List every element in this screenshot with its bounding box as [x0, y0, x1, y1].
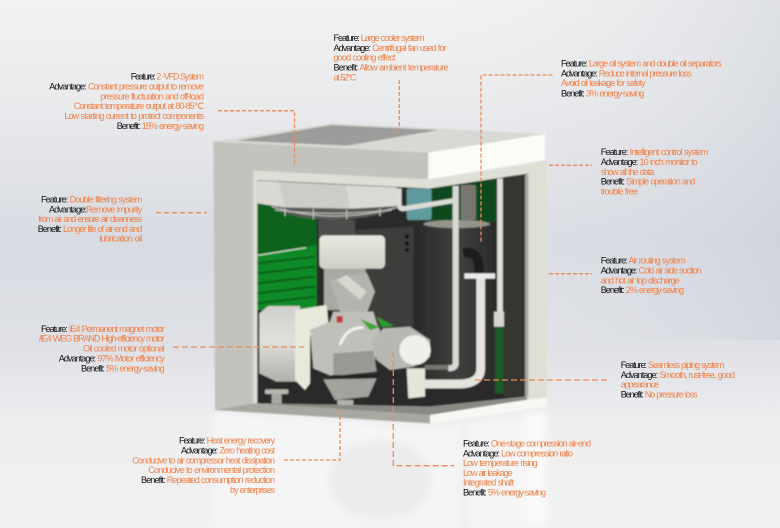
valve: [461, 185, 476, 220]
big discharge pipe: [424, 273, 495, 384]
callout text: Low starting current to protect components: [64, 111, 204, 121]
callout text: Constant temperature output at 80-85℃: [74, 101, 204, 111]
callout: IE4 permanent magnet motor: [39, 324, 304, 373]
callout text: Benefit: 3% energy-saving: [561, 88, 644, 98]
callout text: Advantage: Reduce internal pressure loss: [561, 68, 692, 78]
callout text: Feature: Heat energy recovery: [179, 435, 275, 445]
hopper and foot: [265, 378, 377, 410]
callout text: Avoid oil leakage for safety: [561, 78, 646, 88]
side dark panel: [504, 175, 525, 397]
callout text: by enterprises: [230, 485, 275, 495]
callout: large oil system: [481, 58, 722, 243]
leader line: [173, 346, 304, 348]
callout text: from air and ensure air cleanness: [38, 214, 143, 224]
callout text: Benefit: Longer life of air-end and: [38, 224, 142, 234]
callout text: Advantage: Centrifugal fan used for: [334, 43, 446, 53]
callout text: Integrated shaft: [463, 478, 514, 488]
callout text: Feature: IE4 Permanent magnet motor: [41, 324, 165, 334]
callout text: Advantage: Smooth, rust-free, good: [621, 370, 735, 380]
cabinet shell: [213, 123, 547, 423]
callout text: appearance: [621, 380, 659, 390]
roof: [213, 123, 545, 153]
callout text: show all the data: [601, 167, 655, 177]
callout text: Benefit: Allow ambient temperature: [334, 63, 448, 73]
callout text: [39, 324, 165, 373]
callout text: Conducive to environmental protection: [148, 465, 275, 475]
callout text: at 52°C: [334, 72, 357, 82]
leader line: [218, 111, 294, 165]
callout text: Benefit: Repeated consumption reduction: [141, 475, 275, 485]
callout: double filtering system: [38, 194, 207, 244]
callout text: Advantage: Constant pressure output to remove: [49, 82, 204, 92]
callout: seamless piping system: [475, 360, 735, 399]
roof grille: [237, 125, 438, 146]
callout text: /IE4 WEG BRAND High-efficiency motor: [39, 334, 165, 344]
callout text: Advantage: 97% Motor efficiency: [59, 353, 165, 363]
leader line: [549, 164, 592, 166]
callout text: [561, 58, 722, 98]
fan guard: [272, 206, 397, 220]
teal filter: [407, 188, 432, 220]
oil tank: [418, 220, 495, 380]
callout: heat energy recovery: [132, 410, 340, 495]
callout text: Feature: 2 -VFD System: [131, 72, 204, 82]
callout text: Advantage: 10 inch monitor to: [601, 157, 698, 167]
right green panels: [432, 179, 497, 222]
dark back panel: [353, 227, 413, 327]
callout text: Feature: Large oil system and double oil separators: [561, 58, 722, 68]
callout text: [132, 435, 275, 495]
callout text: [38, 194, 143, 244]
callout text: Advantage: Low compression ratio: [463, 448, 573, 458]
leader line: [284, 410, 340, 460]
callout text: Benefit: No pressure loss: [621, 389, 698, 399]
callout: one-stage compression air-end: [393, 352, 591, 498]
callout: 2-VFD system: [49, 72, 294, 165]
callout text: Feature: Double filtering system: [41, 194, 142, 204]
callout text: Benefit: 5% energy-saving: [81, 363, 165, 373]
callout text: [621, 360, 735, 399]
white roof face: [428, 134, 545, 179]
callout text: Benefit: 5% energy-saving: [463, 488, 546, 498]
callout text: Low temperature rising: [463, 458, 538, 468]
callout text: good cooling effect: [334, 53, 396, 63]
callout text: and hot air top discharge: [601, 275, 680, 285]
callout text: trouble free: [601, 187, 638, 197]
leader line: [481, 75, 552, 243]
callout text: Feature: Seamless piping system: [621, 360, 724, 370]
cabinet interior: [257, 174, 525, 407]
callout: air routing system: [549, 256, 702, 295]
white base face: [430, 397, 547, 423]
callout text: Feature: Air routing system: [601, 256, 686, 266]
callout text: Benefit: Simple operation and: [601, 177, 695, 187]
front frame: [213, 142, 430, 423]
callout text: Benefit: 15% energy-saving: [117, 121, 204, 131]
base lip: [215, 403, 430, 423]
under roof strip: [253, 165, 528, 403]
callout text: [334, 33, 448, 82]
leader line: [156, 212, 207, 214]
leader line: [393, 352, 454, 466]
piping: top and vertical: [399, 178, 504, 368]
callout text: Advantage: Cold air side suction: [601, 266, 702, 276]
callout text: Oil cooled motor optional: [83, 344, 165, 354]
air filter cylinder: [318, 220, 385, 310]
leader line: [549, 273, 592, 275]
callout text: [601, 256, 702, 295]
leader line: [398, 80, 400, 134]
callout text: Advantage: Zero heating cost: [181, 445, 275, 455]
callout text: [601, 147, 708, 197]
callout text: [49, 72, 204, 131]
callout text: Conducive to air compressor heat dissipation: [132, 455, 275, 465]
callout text: lubrication oil: [99, 234, 142, 244]
intake valve: [329, 273, 375, 313]
callout text: [463, 438, 591, 498]
compressor machine: [213, 123, 547, 423]
callout text: Benefit: 2% energy-saving: [601, 285, 684, 295]
callout: intelligent control system: [549, 147, 708, 197]
callout text: Feature: Intelligent control system: [601, 147, 708, 157]
motor: [259, 305, 328, 390]
callout: large cooler system: [334, 33, 448, 134]
callout text: Advantage:Remove impurity: [49, 204, 143, 214]
green radiator: [257, 204, 317, 310]
callout text: Feature: Large cooler system: [334, 33, 424, 43]
callout text: Low air leakage: [463, 468, 513, 478]
fan housing: [257, 181, 397, 209]
right post: [528, 161, 547, 399]
callout text: pressure fluctuation and off-load: [100, 91, 204, 101]
air-end: [310, 312, 431, 398]
leader line: [475, 379, 608, 381]
callout text: Feature: One-stage compression air-end: [463, 438, 591, 448]
floor reflection of machine: [214, 412, 547, 528]
floor: [253, 397, 528, 415]
